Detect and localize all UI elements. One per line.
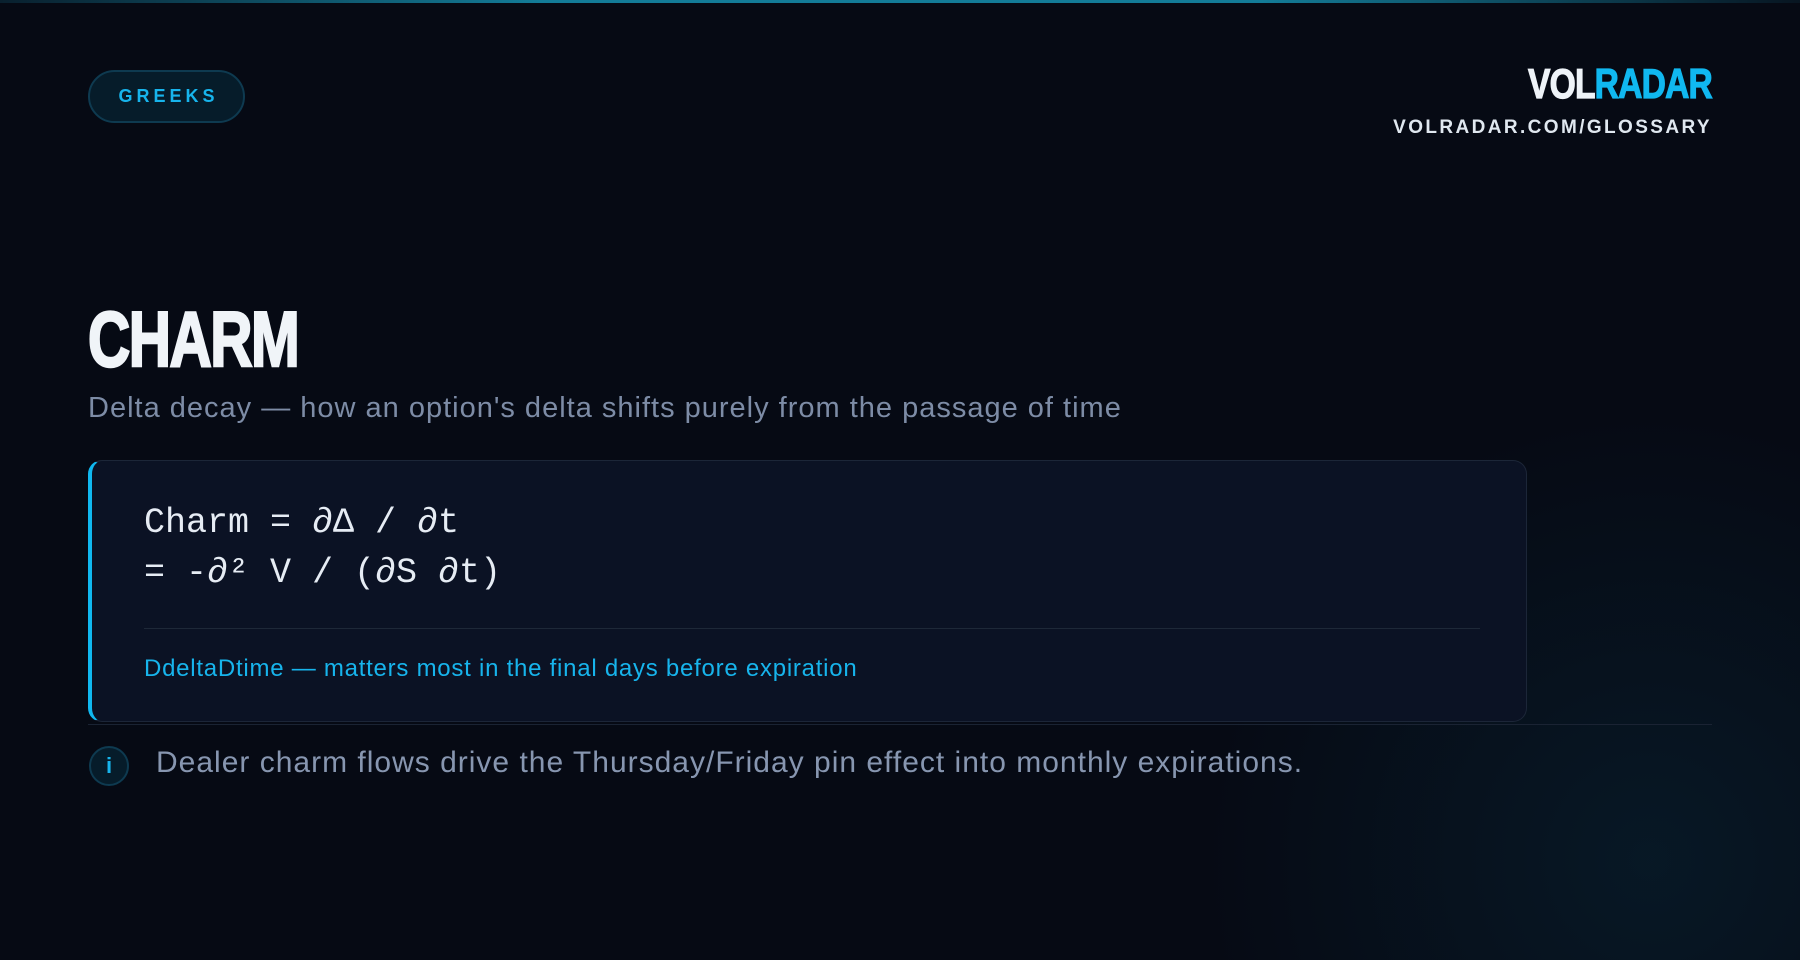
icon: info: i [106, 753, 112, 778]
icon: info [89, 746, 129, 786]
caption: DdeltaDtime — matters most in the final days before expiration [144, 655, 857, 682]
logo: VOLRADAR [1528, 60, 1712, 107]
url: VOLRADAR.COM/GLOSSARY [1393, 117, 1712, 138]
category pill: GREEKS [118, 86, 219, 106]
title: CHARM [88, 295, 298, 383]
category pill [88, 70, 245, 123]
subtitle: Delta decay — how an option's delta shifts purely from the passage of time [88, 392, 1122, 424]
note text: Dealer charm flows drive the Thursday/Friday pin effect into monthly expirations. [156, 746, 1303, 779]
panel: formula box [88, 460, 1527, 722]
formula line 1: Charm = ∂Δ / ∂t [144, 503, 459, 543]
formula line 2: = -∂² V / (∂S ∂t) [144, 553, 501, 593]
